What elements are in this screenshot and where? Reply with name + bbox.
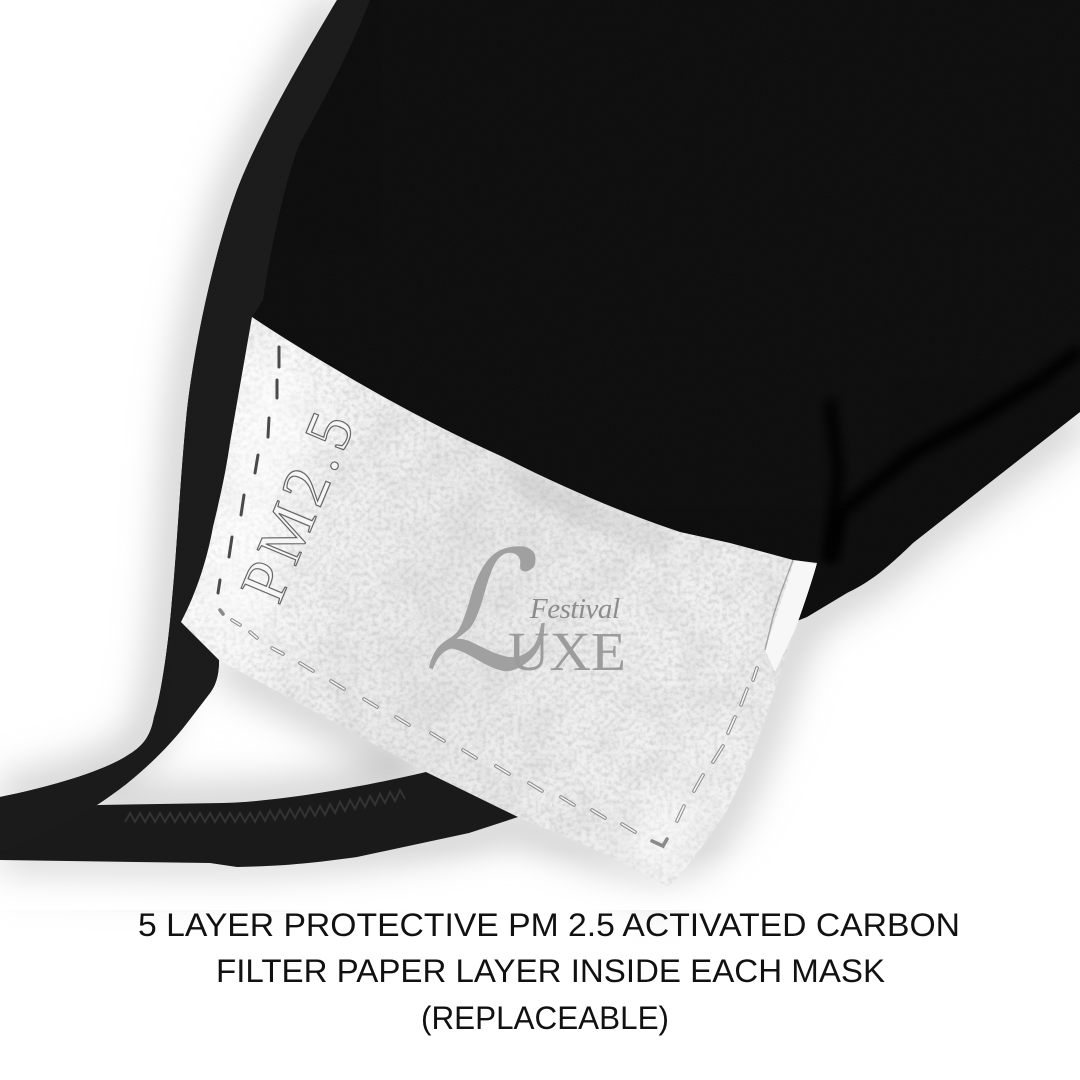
- caption line 3: (REPLACEABLE): [421, 1000, 669, 1036]
- Festival Luxe watermark logo: [413, 515, 626, 708]
- logo word UXE: UXE: [508, 621, 626, 682]
- right fold shading: [824, 350, 1078, 562]
- caption line 2: FILTER PAPER LAYER INSIDE EACH MASK: [216, 953, 885, 989]
- paper mottling texture: [170, 310, 830, 895]
- white PM2.5 filter sheet: [170, 310, 830, 895]
- left stitches: [218, 347, 279, 593]
- filter inner fold line: [765, 560, 793, 650]
- caption line 1: 5 LAYER PROTECTIVE PM 2.5 ACTIVATED CARBON: [138, 907, 960, 943]
- right ear strap with zigzag stitching: [0, 772, 560, 867]
- left seam band: [0, 0, 370, 853]
- bottom and right stitches: [220, 610, 757, 846]
- logo script L: ℒ: [413, 515, 580, 708]
- caption text: [138, 907, 960, 1036]
- embossed PM2.5 marking: PM2.5: [226, 402, 368, 611]
- black mask body with left ear loop: [0, 0, 1080, 860]
- logo word Festival: Festival: [529, 593, 620, 625]
- bottom shadow fade: [0, 850, 1080, 910]
